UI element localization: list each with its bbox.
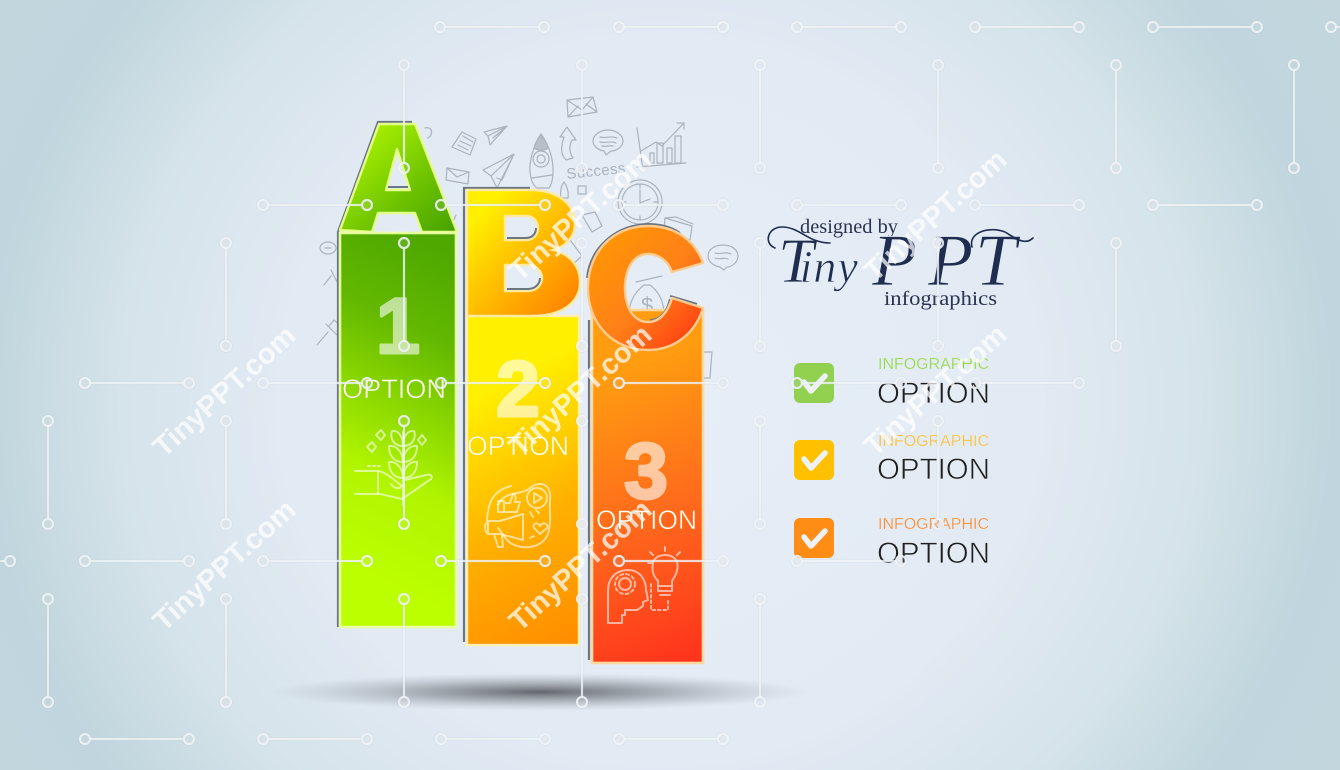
bar 3 bbox=[592, 310, 703, 663]
icon: rocket bbox=[530, 134, 553, 188]
legend option: OPTION bbox=[877, 537, 990, 570]
icon: speech bubble right bbox=[708, 245, 738, 270]
watermark: TinyPPT.com bbox=[147, 320, 302, 464]
watermarks bbox=[147, 144, 1013, 638]
watermark: TinyPPT.com bbox=[147, 494, 302, 638]
icon: bag and book bbox=[570, 212, 712, 378]
watermark: TinyPPT.com bbox=[503, 494, 658, 638]
checkbox green bbox=[794, 363, 834, 403]
icon: clip and pencil bbox=[420, 128, 456, 228]
bar 2 shadow edge bbox=[464, 188, 530, 642]
icon: growth chart bbox=[637, 123, 686, 170]
option label 1: OPTION bbox=[342, 374, 446, 404]
icon: books bbox=[664, 217, 693, 240]
watermark: TinyPPT.com bbox=[503, 144, 658, 288]
letter A shadow edge bbox=[338, 122, 412, 627]
icon: envelope top bbox=[567, 97, 597, 117]
letter B bbox=[467, 190, 580, 316]
logo line: designed by: designed by bbox=[800, 216, 898, 238]
icon: ring left bbox=[320, 242, 336, 254]
check mark bbox=[804, 531, 825, 546]
legend item 1 bbox=[794, 356, 990, 410]
icon: vase bbox=[578, 186, 586, 194]
bar 1 bbox=[340, 233, 456, 627]
icon: money bag bbox=[629, 276, 664, 322]
bar 2 bbox=[467, 316, 579, 645]
icon: pins left bbox=[317, 270, 341, 345]
text: success doodle: Success bbox=[566, 160, 627, 183]
text: dollar doodle: $ bbox=[641, 293, 653, 318]
option label 3: OPTION bbox=[596, 505, 697, 535]
icon: rocket nose bbox=[534, 134, 548, 150]
number 1: 1 bbox=[376, 281, 420, 370]
option label 2: OPTION bbox=[467, 431, 569, 461]
icon: hand holding plant bbox=[355, 430, 432, 505]
bar C column bbox=[587, 224, 703, 663]
legend text: INFOGRAPHIC bbox=[878, 516, 989, 533]
icon: envelope small bbox=[446, 168, 469, 184]
bar B column bbox=[464, 188, 580, 645]
doodle cloud behind letters bbox=[317, 97, 738, 378]
number 2: 2 bbox=[496, 344, 540, 433]
icon: paper plane large bbox=[483, 154, 514, 188]
B counter shadows bbox=[507, 228, 540, 289]
bar 3 shadow edge bbox=[588, 320, 590, 660]
icon: megaphone in blob bbox=[485, 484, 550, 547]
icon: curved arrow bbox=[560, 127, 576, 160]
watermark: TinyPPT.com bbox=[858, 144, 1013, 288]
check mark bbox=[804, 376, 825, 391]
letter A bbox=[340, 124, 457, 232]
watermark: TinyPPT.com bbox=[858, 319, 1013, 463]
icon: clock bbox=[618, 180, 662, 224]
legend text: INFOGRAPHIC bbox=[878, 356, 989, 373]
check mark bbox=[804, 453, 825, 468]
logo name: PPT: PPT bbox=[871, 220, 1021, 302]
logo line: infographics: infographics bbox=[884, 288, 997, 310]
legend text: INFOGRAPHIC bbox=[878, 433, 989, 450]
logo swash left bbox=[768, 227, 830, 248]
legend item 3 bbox=[794, 516, 990, 570]
checkbox amber bbox=[794, 440, 834, 480]
floor shadow bbox=[268, 673, 812, 711]
icon: head with gear and bulb bbox=[608, 547, 680, 623]
checkbox orange bbox=[794, 518, 834, 558]
legend item 2 bbox=[794, 433, 990, 486]
icon: note bbox=[452, 132, 476, 155]
icon: speech bubble bbox=[593, 130, 623, 155]
A counter shadow bbox=[388, 186, 408, 188]
logo: designed by TinyPPT infographics bbox=[768, 216, 1033, 310]
bar A column bbox=[338, 122, 457, 627]
legend option: OPTION bbox=[877, 377, 990, 410]
icon: paper plane small bbox=[484, 126, 507, 145]
watermark: TinyPPT.com bbox=[503, 319, 658, 463]
letter C shadow edge bbox=[587, 224, 697, 320]
legend option: OPTION bbox=[877, 453, 990, 486]
number 3: 3 bbox=[624, 426, 668, 515]
letter C bbox=[588, 226, 703, 350]
icon: small rocket bbox=[561, 182, 568, 198]
logo name: Tiny: Tiny bbox=[778, 225, 859, 296]
logo swash right bbox=[972, 230, 1033, 247]
legend bbox=[794, 356, 990, 570]
icon: rocket window bbox=[532, 151, 552, 178]
